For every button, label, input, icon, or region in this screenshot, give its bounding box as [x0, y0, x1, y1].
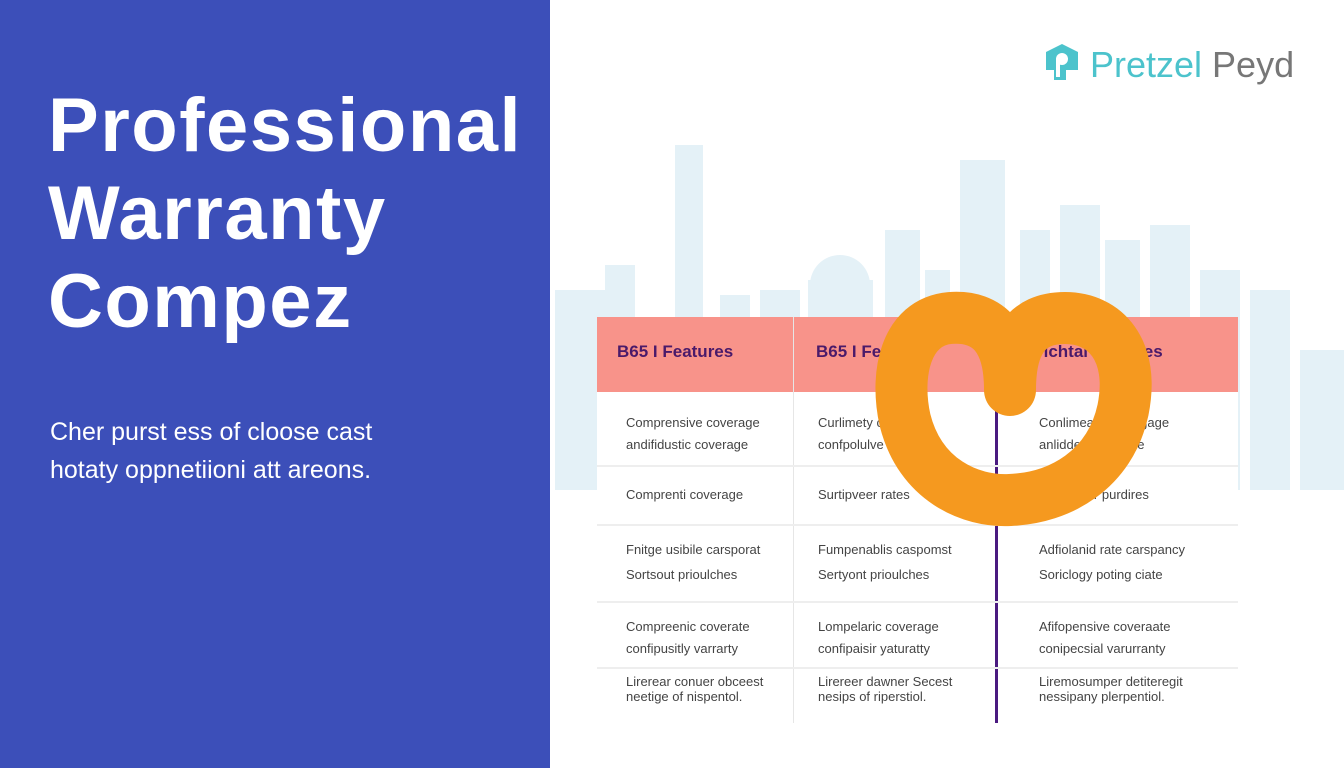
- comparison table: Lirereer dawner Secest: [818, 674, 952, 689]
- table header: B65 I Features: [816, 342, 932, 361]
- comparison table: [597, 317, 1238, 723]
- comparison table: Fumpenablis caspomst: [818, 542, 952, 557]
- comparison table: anlidder coversige: [1039, 437, 1145, 452]
- title: [48, 83, 522, 344]
- table header: B65 I Features: [617, 342, 733, 361]
- column dividers: [793, 317, 794, 723]
- row texts: Comprensive coverage: [626, 415, 760, 430]
- comparison table: Sortsout prioulches: [626, 567, 737, 582]
- comparison table: Surtipveer rates: [818, 487, 910, 502]
- subtitle text: hotaty oppnetiioni att areons.: [50, 456, 371, 484]
- row lines: [597, 465, 1238, 467]
- title: Professional: [48, 83, 522, 168]
- comparison table: Sertyont prioulches: [818, 567, 929, 582]
- comparison table: Surtipveer purdires: [1039, 487, 1149, 502]
- title: Warranty: [48, 171, 387, 256]
- comparison table: nesips of riperstiol.: [818, 689, 926, 704]
- skyline background: [555, 145, 1344, 490]
- icon: logo mark: [1046, 44, 1078, 80]
- comparison table: nessipany plerpentiol.: [1039, 689, 1165, 704]
- comparison table: confipaisir yaturatty: [818, 641, 930, 656]
- comparison table: neetige of nispentol.: [626, 689, 742, 704]
- comparison table: Curlimety coverage: [818, 415, 930, 430]
- comparison table: Lompelaric coverage: [818, 619, 939, 634]
- row texts: andifidustic coverage: [626, 437, 748, 452]
- comparison table: conipecsial varurranty: [1039, 641, 1165, 656]
- comparison table: Fnitge usibile carsporat: [626, 542, 760, 557]
- comparison table: confpolulve coverage: [818, 437, 941, 452]
- subtitle text: Cher purst ess of cloose cast: [50, 418, 372, 446]
- comparison table: Adfiolanid rate carspancy: [1039, 542, 1185, 557]
- row texts: [626, 415, 760, 452]
- comparison table: Liremosumper detiteregit: [1039, 674, 1183, 689]
- subtitle text: [50, 418, 372, 484]
- table header: richtal Services: [1037, 342, 1163, 361]
- comparison table: Afifopensive coveraate: [1039, 619, 1171, 634]
- comparison table: Soriclogy poting ciate: [1039, 567, 1163, 582]
- logo: Pretzel Peyd: [1090, 44, 1294, 85]
- comparison table: Conlimeat coveragage: [1039, 415, 1169, 430]
- table header: [597, 317, 1238, 392]
- title: Compez: [48, 259, 353, 344]
- comparison table: Compreenic coverate: [626, 619, 750, 634]
- comparison table: confipusitly varrarty: [626, 641, 738, 656]
- panel: left blue: [0, 0, 550, 768]
- comparison table: Comprenti coverage: [626, 487, 743, 502]
- comparison table: Lirerear conuer obceest: [626, 674, 763, 689]
- icon: orange pretzel heart: [875, 292, 1152, 526]
